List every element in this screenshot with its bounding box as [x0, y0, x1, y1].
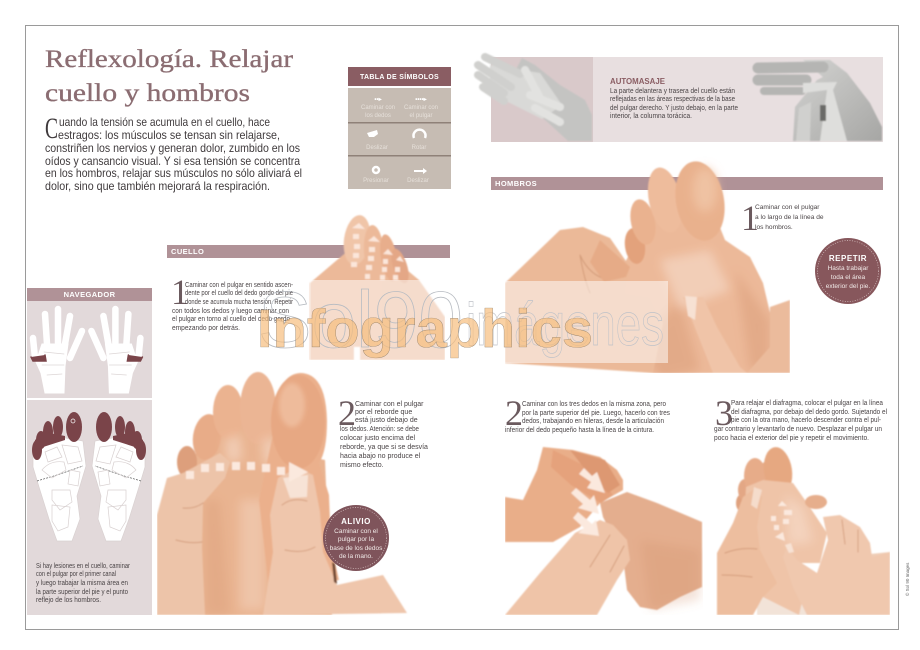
step text: hombros 2: inferior del dedo pequeño hasta la línea de la cintura.	[505, 427, 654, 434]
watermark	[257, 275, 664, 364]
diagram: feet	[32, 412, 146, 541]
arrow dashes	[186, 462, 308, 482]
step text: cuello 2: Caminar con el pulgar	[355, 401, 424, 408]
text: automasaje	[610, 76, 738, 120]
step text: hombros 1: a lo largo de la línea de	[755, 214, 824, 221]
step text: cuello 2: mismo efecto.	[340, 462, 384, 469]
panel: tabla de símbolos: Deslizar	[366, 145, 388, 151]
callout: repetir: toda el área	[831, 274, 866, 281]
leg and foot	[600, 492, 702, 610]
step text: cuello 2: los dedos. Atención: se debe	[340, 426, 419, 433]
photo: hands massaging foot, step 2 hombros	[505, 447, 702, 615]
icon: deslizar arrow	[414, 168, 427, 174]
left hand	[717, 487, 777, 615]
step text: cuello 1: el pulgar en torno al cuello del dedo gordo	[172, 316, 290, 323]
arrow marks	[771, 501, 792, 541]
step text: cuello 2	[338, 393, 428, 469]
right hand	[747, 300, 790, 373]
step text: cuello 2: está justo debajo de	[355, 417, 418, 424]
intro text: dolor, sino que también mejorará la respiración.	[45, 179, 270, 193]
step text: hombros 1: 1	[741, 198, 759, 238]
step text: cuello 2: hacia abajo no produce el	[340, 453, 421, 460]
watermark: Sol90	[258, 275, 463, 364]
step text: hombros 2	[505, 393, 670, 434]
step text: hombros 3: gar contrario y levantarlo de nuevo. Desplazar el pulgar un	[714, 426, 882, 433]
step text: cuello 2: reborde, ya que si se desvía	[340, 444, 428, 451]
text: automasaje: AUTOMASAJE	[610, 76, 665, 86]
step text: cuello 2: colocar justo encima del	[340, 435, 416, 442]
step text: hombros 3: Para relajar el diafragma, colocar el pulgar en la línea	[731, 400, 883, 407]
icon: caminar con los dedos: ••▸	[374, 97, 383, 103]
step text: hombros 3: 3	[715, 393, 733, 433]
right hand	[263, 468, 407, 615]
diagram: hands	[31, 309, 142, 393]
text: navegador note	[36, 563, 131, 604]
callout: repetir: Hasta trabajar	[828, 265, 869, 272]
sole	[743, 480, 827, 615]
heading bar: cuello	[167, 245, 450, 258]
step text: hombros 3: del diafragma, por debajo del dedo gordo. Sujetando el	[731, 409, 887, 416]
photo: toes, cuello	[310, 213, 445, 360]
panel: tabla de símbolos: TABLA DE SÍMBOLOS	[360, 72, 439, 81]
watermark: imágenes	[466, 291, 664, 358]
finger bump	[805, 495, 827, 509]
step text: hombros 1: Caminar con el pulgar	[755, 204, 820, 211]
title: cuello y hombros	[45, 78, 250, 107]
intro text: oídos y cansancio visual. Y si esa tensión se concentra	[45, 154, 300, 168]
icon: deslizar	[367, 130, 378, 137]
callout: repetir: exterior del pie.	[826, 283, 870, 290]
toes	[177, 446, 197, 478]
title	[45, 44, 294, 107]
callout: alivio: ALIVIO	[341, 517, 371, 526]
sole	[190, 415, 332, 615]
right hand	[787, 514, 872, 615]
panel: tabla de símbolos	[348, 67, 451, 189]
panel: tabla de símbolos: los dedos	[365, 113, 391, 119]
icon: caminar con el pulgar: ••••▸	[415, 97, 428, 103]
text: navegador note: con el pulgar por el primer canal	[36, 571, 116, 578]
step text: hombros 3: pie con la otra mano, hacerlo descender contra el pul-	[731, 417, 882, 424]
photo: right hand	[758, 60, 882, 141]
callout: alivio: de la mano.	[339, 553, 373, 560]
toes	[624, 228, 646, 264]
callout: alivio	[323, 505, 389, 571]
intro text: en los hombros, relajar sus músculos no sólo aliviará el	[45, 166, 302, 180]
photo: foot with thumb, step 2 cuello	[157, 372, 407, 615]
callout: alivio: base de los dedos	[330, 545, 383, 552]
text: automasaje: La parte delantera y trasera del cuello están	[610, 88, 735, 95]
heading bar: hombros: HOMBROS	[495, 179, 537, 188]
text: automasaje: del pulgar derecho. Y justo debajo, en la parte	[610, 105, 738, 112]
left hand	[157, 453, 230, 615]
sole	[624, 218, 771, 373]
panel: navegador	[27, 288, 152, 615]
panel: tabla de símbolos: el pulgar	[409, 113, 433, 119]
text: navegador note: Si hay lesiones en el cuello, caminar	[36, 563, 131, 570]
callout: alivio: pulgar por la	[338, 536, 374, 543]
panel: tabla de símbolos: Deslizar	[407, 178, 429, 184]
photo: hands massaging foot, step 3 hombros	[717, 445, 890, 615]
step text: cuello 1: Caminar con el pulgar en sentido ascen-	[185, 282, 294, 289]
text: navegador note: la parte superior del pie y el punto	[36, 589, 128, 596]
text: navegador note: y luego trabajar la misma área en	[36, 580, 128, 587]
text: automasaje: interior, la columna torácica.	[610, 113, 692, 120]
step text: cuello 2: por el reborde que	[355, 409, 412, 416]
step text: hombros 2: por la parte superior del pie. Luego, hacerlo con tres	[522, 410, 670, 417]
step text: hombros 3	[714, 393, 887, 442]
intro text: uando la tensión se acumula en el cuello, hace	[59, 115, 270, 129]
intro text: constriñen los nervios y generan dolor, zumbido en los	[45, 141, 300, 155]
photo: left hands	[478, 57, 592, 141]
title: Reflexología. Relajar	[45, 44, 294, 73]
icon: presionar	[373, 167, 379, 173]
text: navegador note: reflejo de los hombros.	[36, 597, 101, 604]
intro text: C	[45, 112, 58, 145]
panel: navegador: NAVEGADOR	[64, 290, 116, 299]
panel: tabla de símbolos: Caminar con	[404, 105, 438, 111]
watermark: Infographics	[257, 299, 593, 359]
step text: hombros 3: poco hacia el exterior del pie y repetir el movimiento.	[714, 435, 869, 442]
intro text: estragos: los músculos se tensan sin relajarse,	[58, 128, 280, 142]
step text: cuello 1: 1	[171, 272, 189, 312]
toes	[762, 462, 765, 466]
watermark panels	[310, 280, 668, 363]
photo: foot with hand, hombros	[505, 157, 790, 380]
panel: tabla de símbolos: Rotar	[412, 145, 426, 151]
lower hand	[505, 520, 630, 615]
arrows	[571, 468, 605, 536]
step text: hombros 1: los hombros.	[755, 224, 793, 231]
step text: cuello 1: empezando por detrás.	[172, 325, 240, 332]
far leg	[871, 552, 889, 558]
step text: cuello 1: dente por el cuello del dedo gordo del pie	[185, 290, 293, 297]
left hand	[505, 227, 663, 373]
panel: tabla de símbolos: Presionar	[363, 178, 389, 184]
text: automasaje: reflejadas en las áreas respectivas de la base	[610, 96, 735, 103]
step text: hombros 2: dedos, trabajando en hileras, desde la articulación	[522, 418, 664, 425]
step text: cuello 1	[171, 272, 294, 332]
step text: hombros 2: Caminar con los tres dedos en la misma zona, pero	[522, 401, 666, 408]
heading bar: cuello: CUELLO	[171, 247, 204, 256]
step text: hombros 1	[741, 198, 824, 238]
big toe	[259, 373, 339, 590]
upper hand	[505, 447, 623, 542]
heading bar: hombros	[491, 177, 883, 190]
intro text	[45, 112, 302, 193]
callout: repetir: REPETIR	[829, 254, 867, 263]
callout: alivio: Caminar con el	[334, 528, 378, 535]
credit: © Sol 90 Images	[904, 562, 910, 596]
panel: tabla de símbolos: Caminar con	[361, 105, 395, 111]
step text: cuello 1: donde se acumula mucha tensión. Repetir	[185, 299, 294, 306]
step text: cuello 1: con todos los dedos y luego caminar con	[172, 308, 289, 315]
step text: cuello 2: 2	[338, 393, 356, 433]
panel: automasaje	[478, 57, 883, 142]
callout: repetir	[815, 238, 881, 304]
step text: hombros 2: 2	[505, 393, 523, 433]
icon: rotar	[414, 130, 426, 138]
